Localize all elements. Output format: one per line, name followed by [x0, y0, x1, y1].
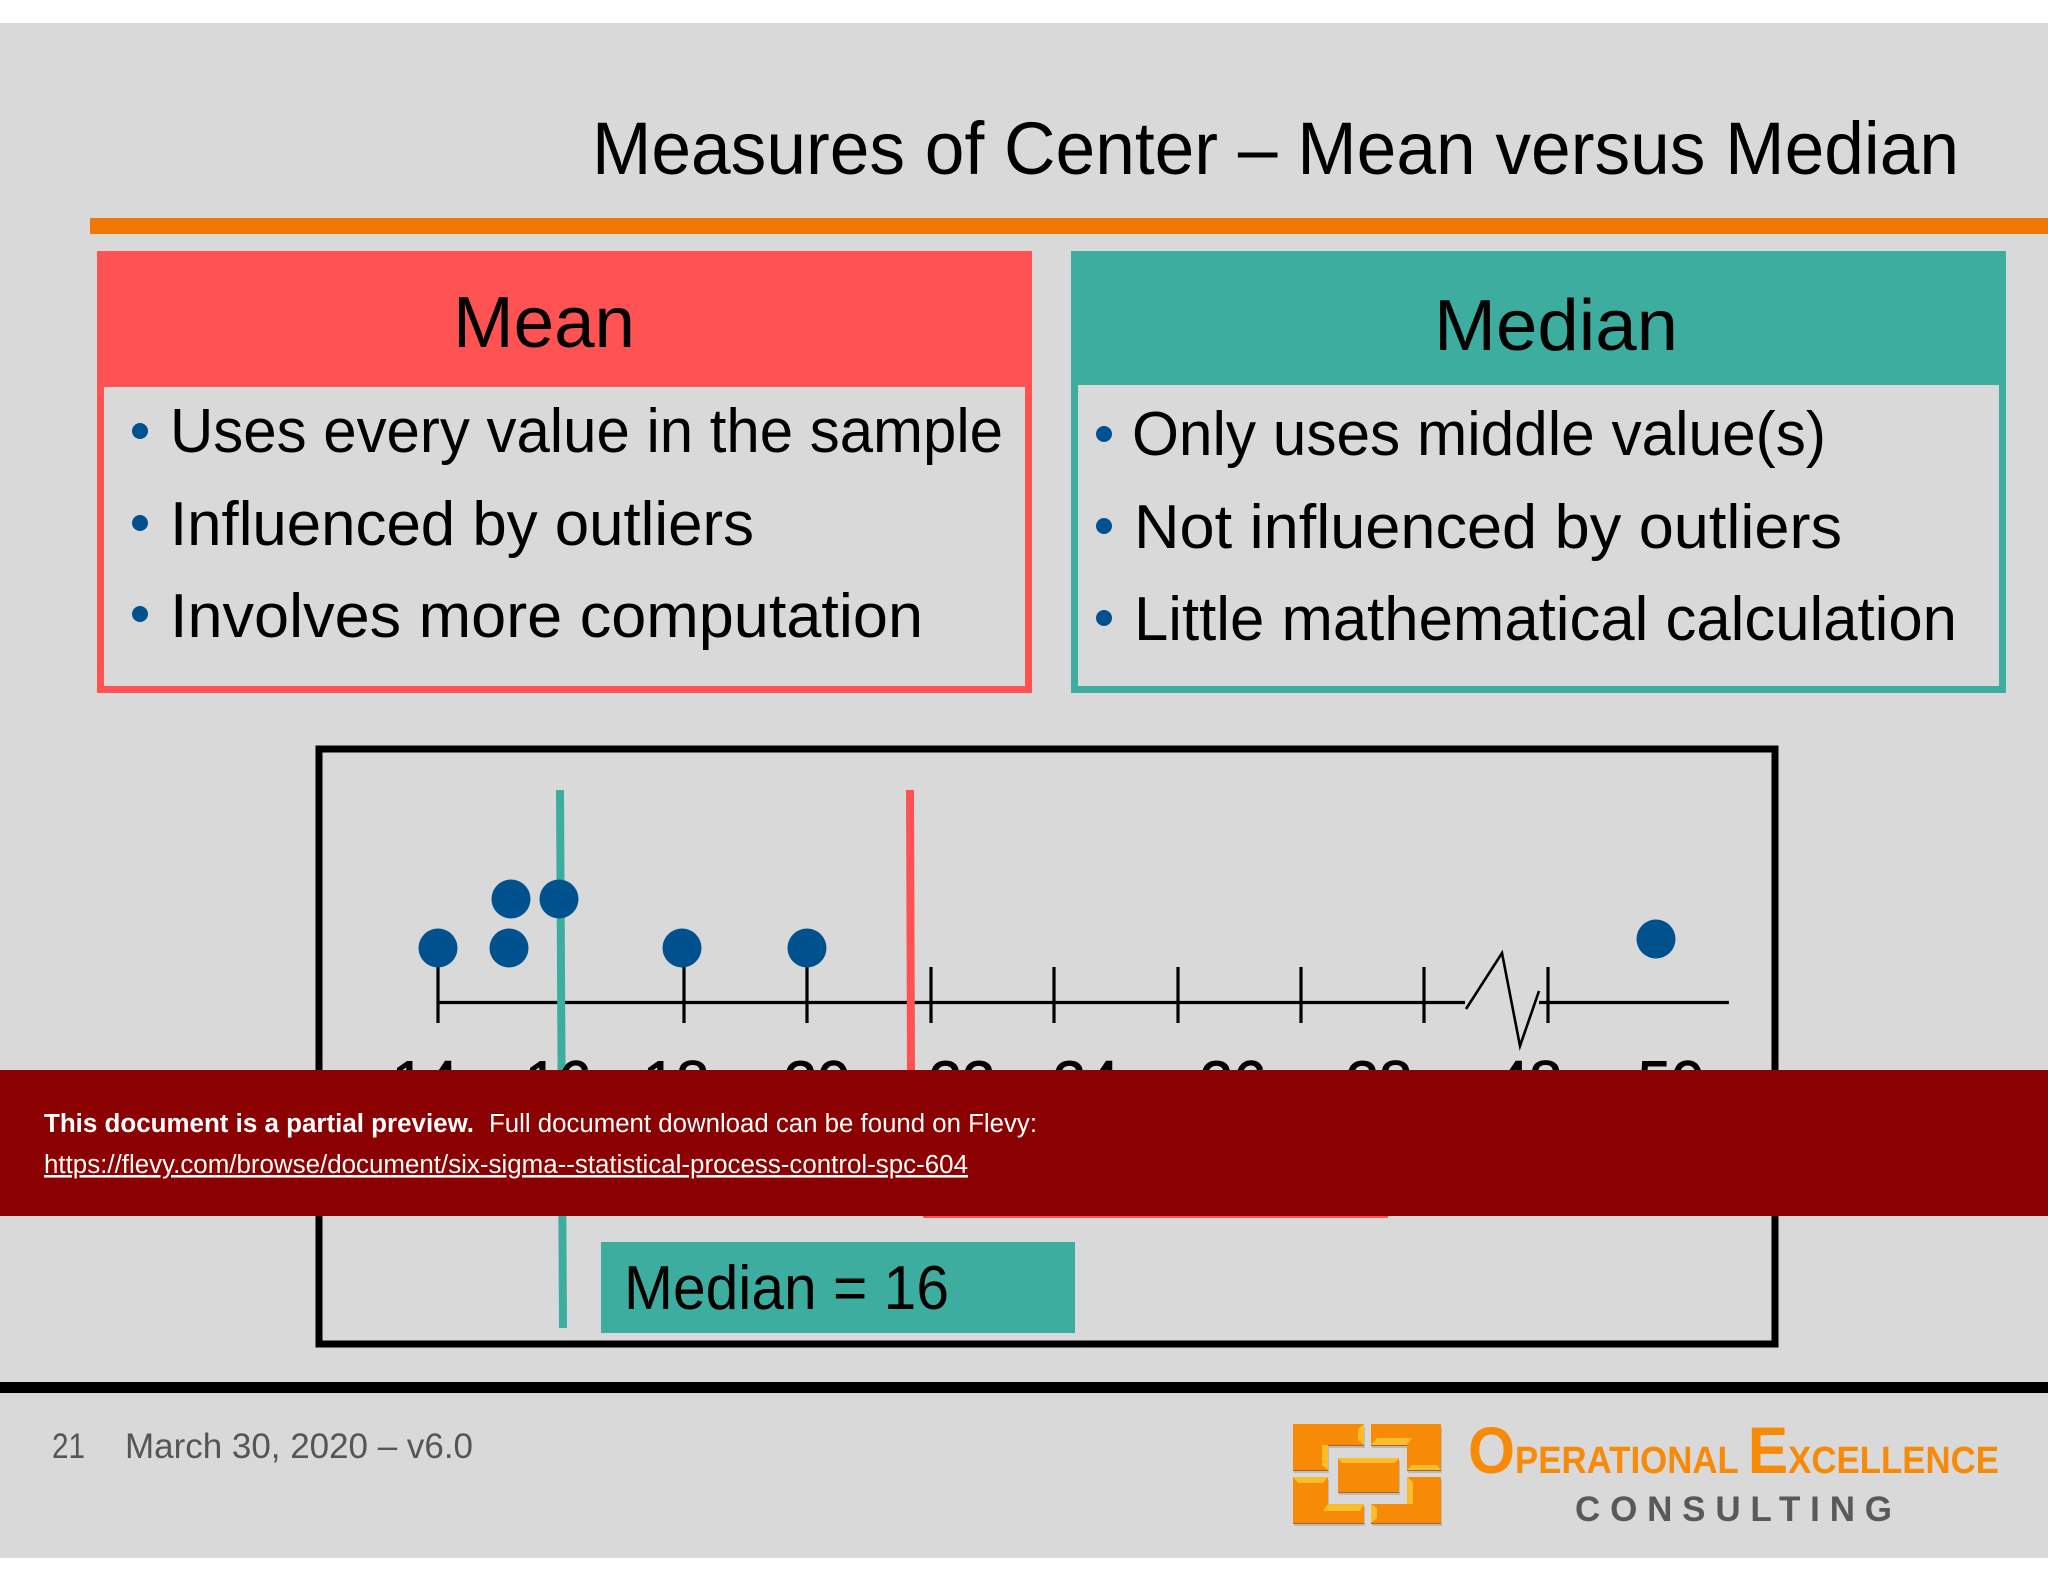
orange title rule: [90, 218, 2048, 234]
median value box: Median = 16: [624, 1254, 949, 1323]
footer date and version: March 30, 2020 – v6.0: [125, 1427, 473, 1466]
mean bullet 3: Involves more computation: [170, 582, 923, 651]
panel: median: [1071, 251, 2006, 690]
banner background: [0, 1070, 2048, 1216]
mean bullet 1: Uses every value in the sample: [170, 397, 1003, 466]
median bullet 2: Not influenced by outliers: [1134, 493, 1842, 562]
icon: orange squares: [1293, 1424, 1442, 1526]
mean value box edge: [923, 1210, 1388, 1218]
logo: [1293, 1413, 1999, 1529]
median bullet 3: Little mathematical calculation: [1134, 585, 1957, 654]
banner download notice: Full document download can be found on Flevy:: [489, 1110, 1037, 1138]
mean marker line: [906, 790, 915, 1072]
axis labels: 26: [1200, 1049, 1266, 1116]
mean bullet 2: Influenced by outliers: [170, 490, 754, 559]
median heading: Median: [1434, 286, 1678, 366]
title: Measures of Center – Mean versus Median: [592, 107, 1959, 190]
axis labels: 22: [929, 1049, 995, 1116]
median bullet 1: Only uses middle value(s): [1132, 400, 1826, 469]
median panel frame: [1074, 254, 2002, 690]
axis labels: 50: [1638, 1049, 1704, 1116]
median header band: [1071, 251, 2006, 385]
banner link text: https://flevy.com/browse/document/six-sigma--statistical-process-control-spc-604: [44, 1151, 968, 1179]
axis labels: 48: [1496, 1049, 1562, 1116]
median value box: [601, 1242, 1075, 1333]
company name: OPERATIONAL EXCELLENCE: [1468, 1413, 1999, 1487]
axis labels: 24: [1053, 1049, 1119, 1116]
data points: [418, 880, 1676, 968]
axis labels: 18: [643, 1049, 709, 1116]
median marker line: [556, 790, 567, 1328]
axis labels: 14: [392, 1049, 458, 1116]
panel: mean: [97, 251, 1032, 690]
axis labels: 20: [784, 1049, 850, 1116]
number line axis: [438, 953, 1729, 1046]
axis labels: 16: [525, 1049, 591, 1116]
page number: 21: [52, 1427, 85, 1466]
mean heading: Mean: [453, 283, 635, 363]
axis labels: [392, 1049, 1704, 1116]
preview banner: [0, 1070, 2048, 1216]
footer rule: [0, 1382, 2048, 1393]
mean panel frame: [100, 254, 1028, 690]
company subtitle: CONSULTING: [1575, 1490, 1892, 1529]
mean header band: [97, 251, 1032, 387]
banner bold notice: This document is a partial preview.: [44, 1110, 474, 1138]
dot plot chart: [319, 749, 1775, 1344]
axis labels: 28: [1346, 1049, 1412, 1116]
chart frame: [319, 749, 1775, 1344]
